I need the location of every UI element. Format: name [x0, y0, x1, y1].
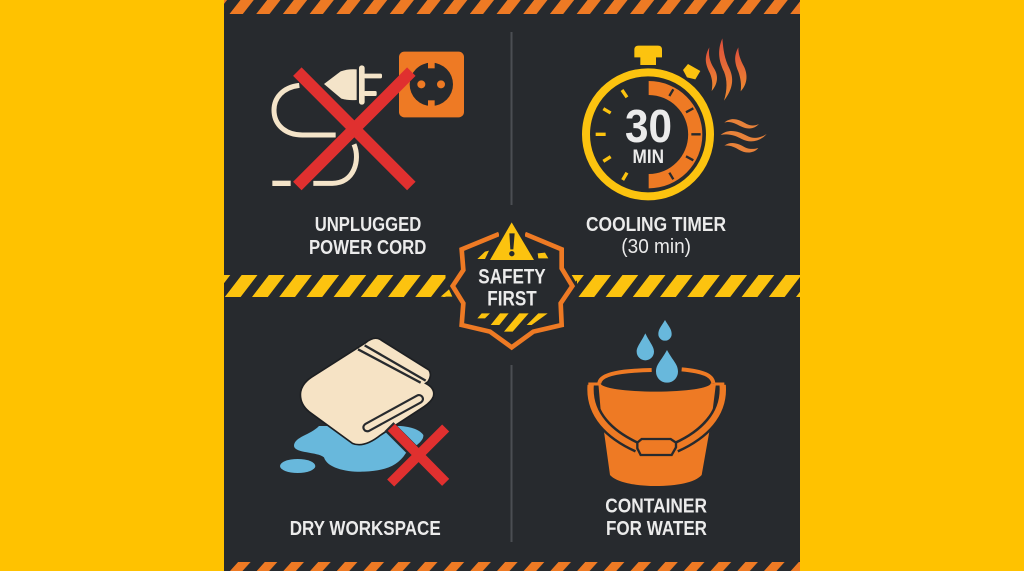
dark central panel — [224, 0, 800, 571]
panel: container for water — [588, 320, 724, 540]
badge stripes — [477, 313, 548, 332]
label: cooling timer: (30 min) — [621, 236, 691, 258]
panel: cooling timer — [586, 38, 767, 258]
label: unplugged power cord: POWER CORD — [309, 237, 426, 259]
icon: warning triangle — [477, 222, 548, 260]
label: unplugged power cord: UNPLUGGED — [315, 214, 421, 236]
label: unplugged power cord — [309, 214, 426, 259]
timer unit: MIN — [632, 147, 664, 168]
icon: stopwatch — [586, 46, 710, 196]
panel: unplugged power cord — [272, 52, 464, 259]
badge text: FIRST — [487, 288, 537, 311]
icon: water bucket — [588, 369, 724, 486]
icon: wall socket — [399, 52, 464, 117]
lower vertical divider — [510, 365, 512, 542]
label: container for water: CONTAINER — [605, 496, 707, 518]
label: dry workspace: DRY WORKSPACE — [290, 518, 441, 540]
tape fragments beside badge — [441, 275, 582, 297]
top hazard stripe — [224, 0, 800, 14]
icon: folded towel — [300, 338, 434, 445]
badge text — [478, 265, 546, 311]
safety first badge — [441, 222, 582, 347]
icon: plug and cord — [272, 65, 382, 186]
timer value: 30 — [625, 100, 672, 152]
icon: rising heat waves — [706, 38, 747, 101]
bottom hazard stripe — [224, 562, 800, 571]
left caution tape — [224, 275, 446, 297]
icon: water puddle — [280, 426, 423, 473]
label: container for water — [605, 496, 707, 540]
label: cooling timer: COOLING TIMER — [586, 214, 726, 236]
right caution tape — [577, 275, 800, 297]
label: container for water: FOR WATER — [606, 518, 707, 540]
label: cooling timer — [586, 214, 726, 258]
icon: sideways heat waves — [721, 119, 767, 153]
upper vertical divider — [510, 32, 512, 205]
icon: water drops — [637, 320, 678, 383]
panel: dry workspace — [280, 338, 446, 540]
badge outline — [453, 232, 572, 347]
icon: red cross — [297, 72, 411, 186]
icon: small red cross — [389, 427, 446, 483]
badge text: SAFETY — [478, 265, 546, 288]
